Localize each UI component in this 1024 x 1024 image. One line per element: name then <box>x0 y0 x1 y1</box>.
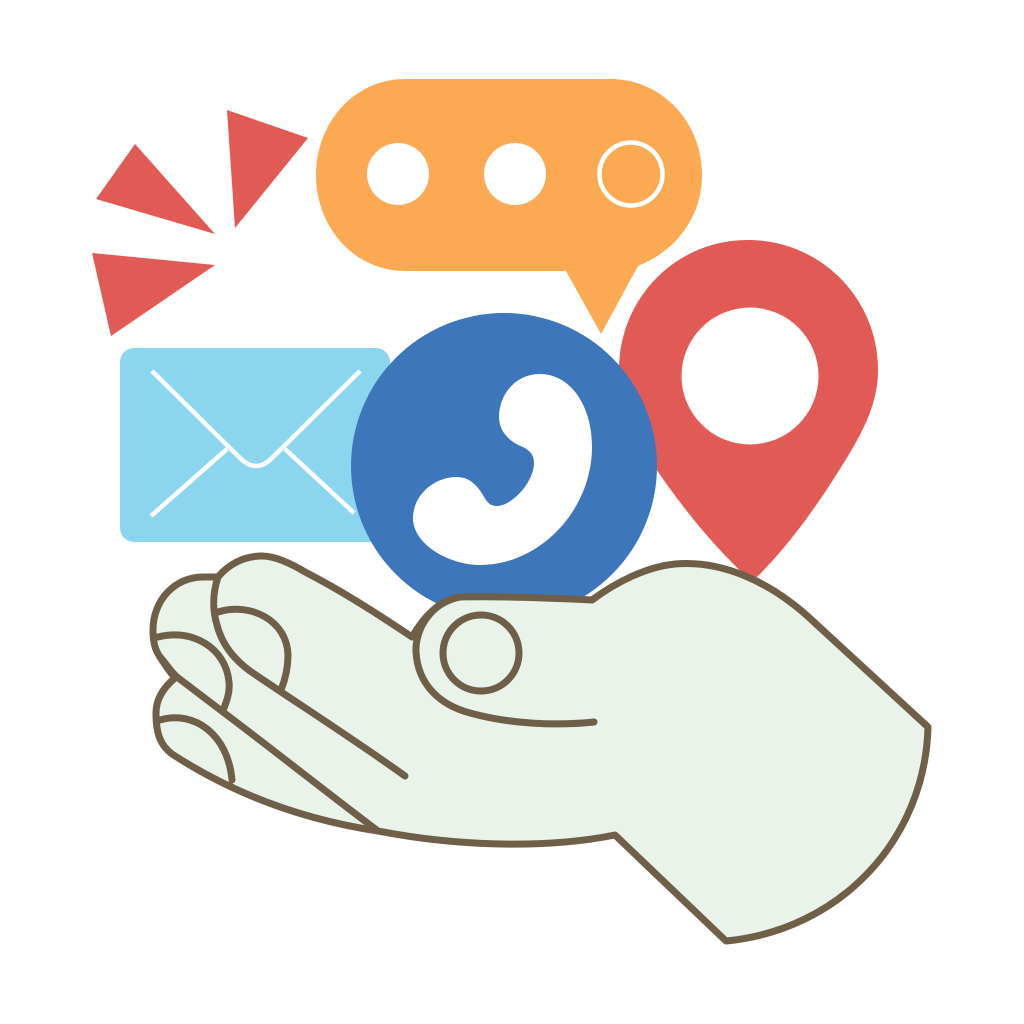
icon: phone handset <box>413 374 592 565</box>
hand: thumb <box>416 597 594 724</box>
hand: thumbnail <box>443 615 519 691</box>
hand <box>153 556 928 941</box>
icon: blue phone circle <box>351 313 657 619</box>
icon: blue envelope <box>120 348 390 542</box>
icon: red location pin <box>619 240 878 582</box>
icon: orange speech bubble <box>316 79 702 334</box>
hand: silhouette <box>153 556 928 941</box>
hand: middle fingernail <box>158 635 229 708</box>
hand: index fingernail <box>218 609 288 690</box>
hand: index finger line <box>214 577 405 776</box>
hand: ring fingernail <box>160 718 232 780</box>
hand: middle finger line <box>160 657 378 831</box>
icon: red alert triangles <box>92 110 308 336</box>
